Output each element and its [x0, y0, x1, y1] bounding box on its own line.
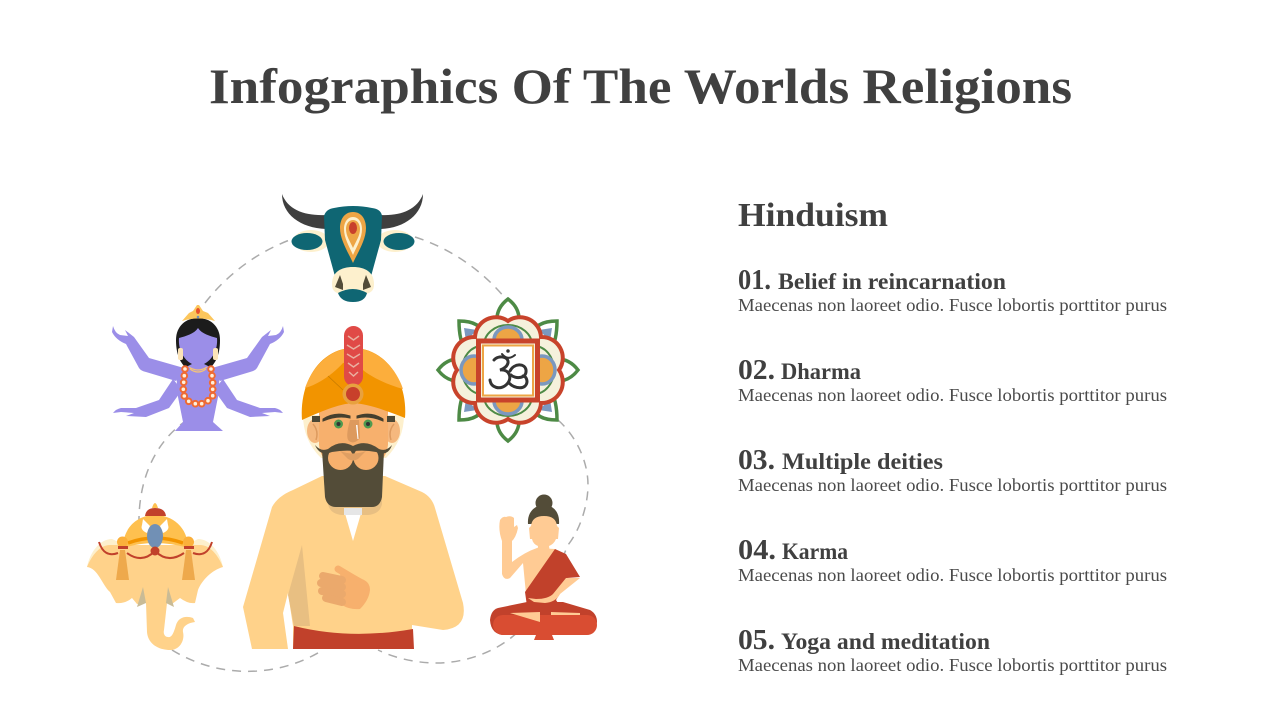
turban jewel [342, 384, 364, 404]
dashed connector arcs [139, 237, 588, 671]
turban feather [344, 326, 363, 386]
beard shadow [328, 495, 382, 515]
sash [293, 626, 414, 649]
eyes [334, 420, 343, 428]
item 03: Multiple deities [782, 449, 943, 474]
scalloped red border [453, 317, 563, 423]
item 03: 03. [738, 445, 775, 476]
arms left side [112, 326, 184, 417]
character: meditating buddha [490, 494, 597, 640]
crossed legs [490, 602, 597, 635]
item 03 [738, 445, 1167, 495]
item 05: 05. [738, 625, 775, 656]
item 04: 04. [738, 535, 776, 566]
item 01: Maecenas non laoreet odio. Fusce lobortis porttitor purus [738, 295, 1167, 315]
heading: Hinduism [738, 197, 888, 234]
item 02: Dharma [781, 359, 861, 384]
body [243, 476, 464, 649]
raised hand [499, 516, 518, 542]
arm shadow [288, 545, 310, 626]
hair [176, 318, 220, 367]
moustache [315, 443, 392, 453]
raised arm and torso [502, 540, 556, 594]
folded arm [528, 578, 580, 603]
item 05: Maecenas non laoreet odio. Fusce lobortis porttitor purus [738, 655, 1167, 675]
face [179, 328, 217, 372]
neck opening [344, 510, 362, 541]
item 02: Maecenas non laoreet odio. Fusce lobortis porttitor purus [738, 385, 1167, 405]
red rope [99, 542, 212, 558]
turban [302, 348, 405, 420]
item 03: Maecenas non laoreet odio. Fusce lobortis porttitor purus [738, 475, 1167, 495]
hair and bun [536, 494, 552, 512]
flower necklace [180, 366, 216, 407]
item 04 [738, 535, 1167, 585]
item 05: Yoga and meditation [781, 629, 990, 654]
head dome [123, 515, 188, 548]
crown top [145, 508, 166, 516]
icon: bull head [282, 194, 423, 302]
outer green petals [438, 299, 578, 441]
nose [347, 420, 360, 442]
item 01: Belief in reincarnation [778, 269, 1006, 294]
inner green rings [462, 325, 554, 416]
central square [478, 341, 538, 400]
title: Infographics Of The Worlds Religions [209, 58, 1072, 114]
item 04: Karma [782, 539, 848, 564]
face [319, 400, 388, 470]
beard [322, 450, 384, 507]
tassels [116, 550, 195, 580]
eyebrows [323, 414, 350, 421]
cheeks [328, 446, 353, 470]
robe [525, 549, 580, 606]
item 02: 02. [738, 355, 775, 386]
icon: four-armed goddess [112, 305, 284, 431]
face [529, 516, 559, 553]
icon: om mandala [438, 299, 578, 441]
hair backing [303, 415, 404, 458]
panel: hinduism list [738, 197, 1167, 675]
blue rings [461, 327, 555, 414]
character: man with turban [243, 326, 464, 649]
feet [510, 612, 580, 622]
torso and skirt [175, 364, 223, 431]
hand [321, 567, 370, 609]
crown [182, 305, 215, 321]
ears [307, 419, 323, 443]
item 05 [738, 625, 1167, 675]
item 04: Maecenas non laoreet odio. Fusce lobortis porttitor purus [738, 565, 1167, 585]
item 02 [738, 355, 1167, 405]
sideburns [312, 416, 395, 422]
item 01: 01. [738, 265, 771, 296]
icon: ganesha elephant head [87, 503, 223, 650]
om symbol [490, 350, 527, 388]
arms right side [212, 326, 284, 417]
item 01 [738, 265, 1167, 315]
